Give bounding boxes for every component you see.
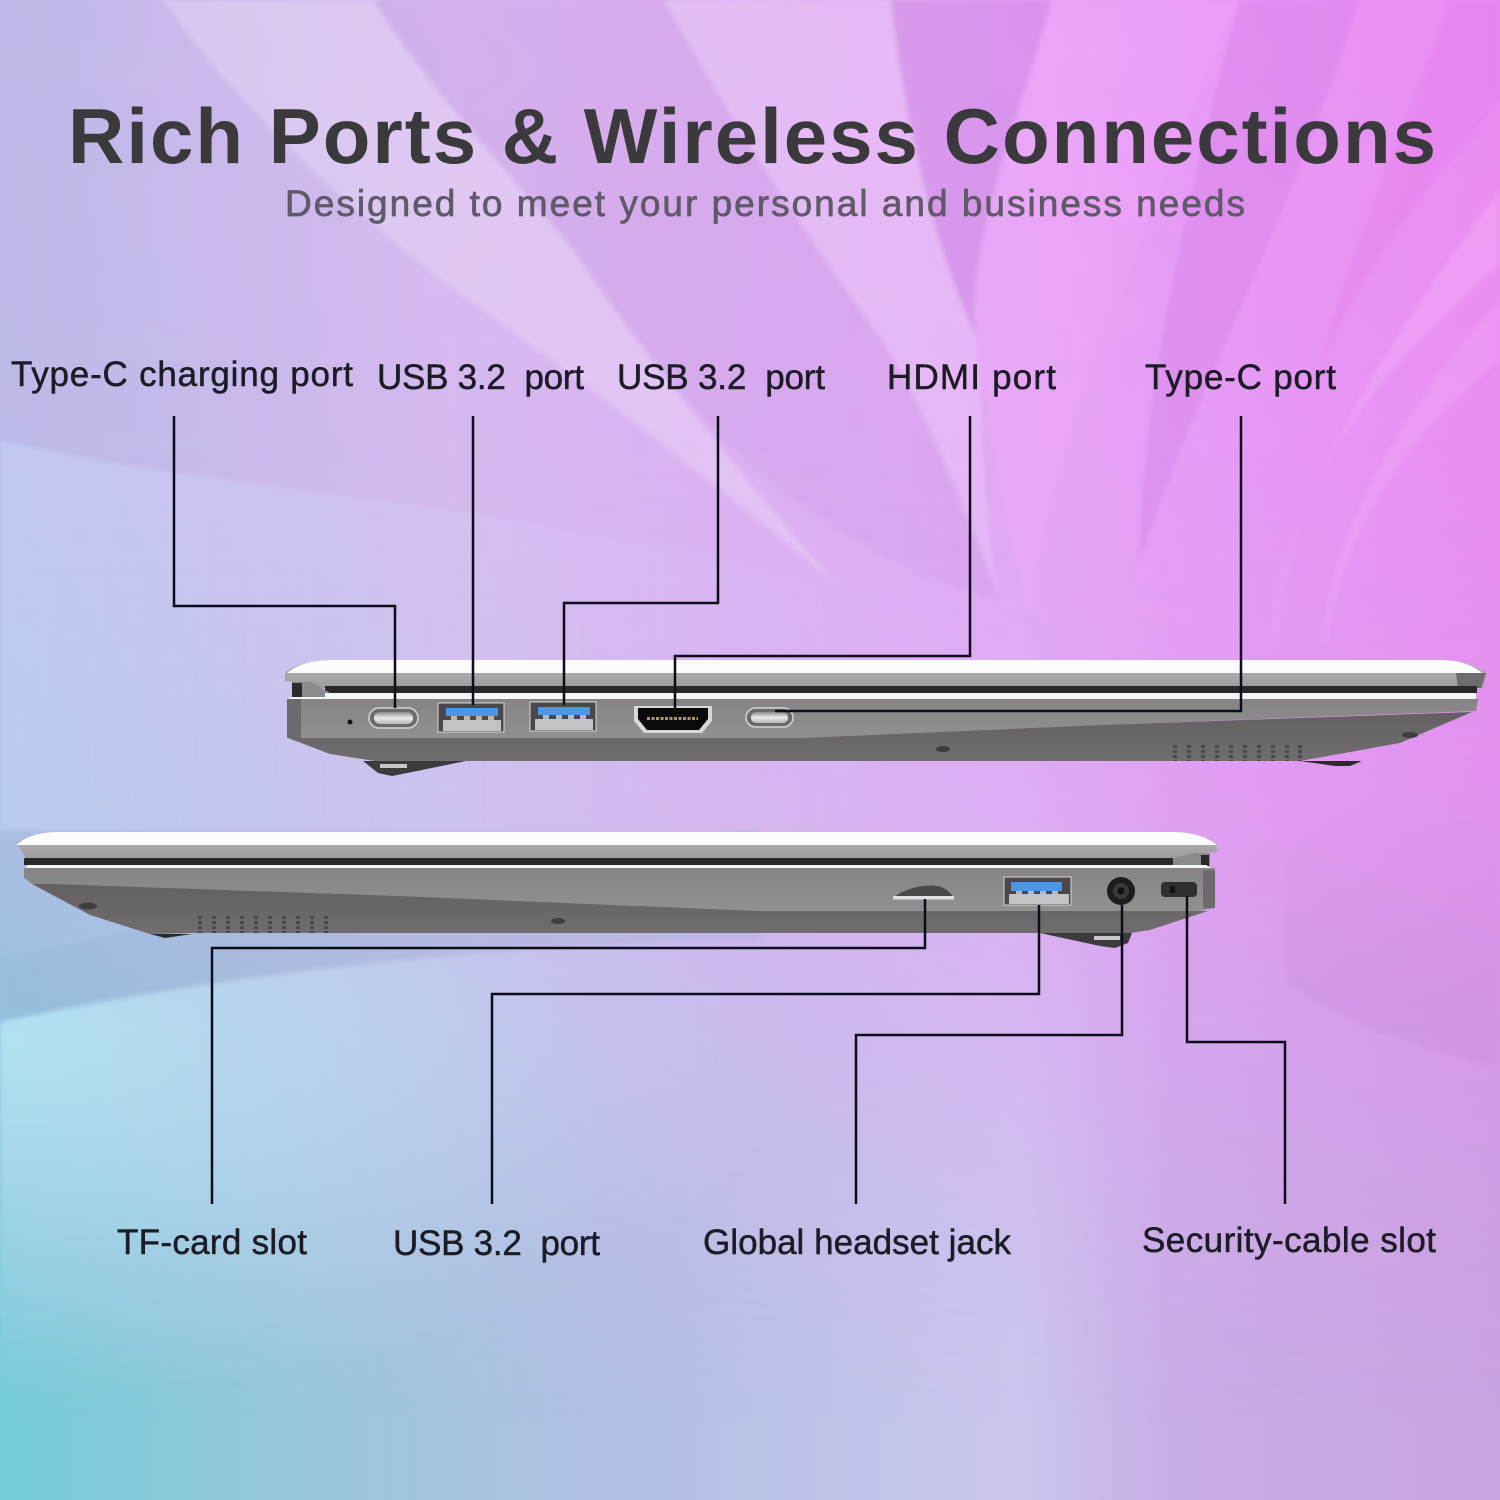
port: type-c	[746, 708, 793, 727]
title: Rich Ports & Wireless Connections	[68, 92, 1436, 180]
port labels: top laptop: USB 3.2 port	[617, 358, 825, 397]
connector lines: bottom laptop	[212, 896, 1285, 1204]
port: HDMI	[634, 706, 712, 733]
subtitle: Designed to meet your personal and business needs	[285, 183, 1245, 224]
port: security slot	[1161, 882, 1197, 897]
port labels: bottom laptop: Security-cable slot	[1142, 1221, 1436, 1260]
port: type-c charging	[369, 708, 418, 728]
port: TF-card slot	[893, 886, 954, 900]
port labels: bottom laptop: USB 3.2 port	[393, 1224, 600, 1263]
lid	[285, 660, 1487, 699]
lid	[16, 832, 1217, 868]
laptop: right side view	[16, 832, 1217, 948]
port labels: top laptop	[11, 355, 1336, 397]
base	[24, 865, 1215, 948]
port labels: bottom laptop: Global headset jack	[703, 1223, 1012, 1262]
port: headset jack	[1107, 877, 1135, 905]
port labels: top laptop: HDMI port	[887, 358, 1056, 397]
port labels: top laptop: Type-C charging port	[11, 355, 353, 394]
port: USB 3.2 first	[438, 703, 504, 732]
port: USB 3.2 second	[530, 702, 596, 731]
port labels: bottom laptop: TF-card slot	[117, 1223, 307, 1262]
base	[287, 693, 1478, 776]
connector lines: top laptop	[174, 416, 1241, 711]
port labels: top laptop: Type-C port	[1145, 358, 1336, 397]
port labels: bottom laptop	[117, 1221, 1436, 1263]
laptop: left side view	[285, 660, 1487, 776]
port: USB 3.2 right	[1004, 877, 1071, 905]
port labels: top laptop: USB 3.2 port	[377, 358, 584, 397]
